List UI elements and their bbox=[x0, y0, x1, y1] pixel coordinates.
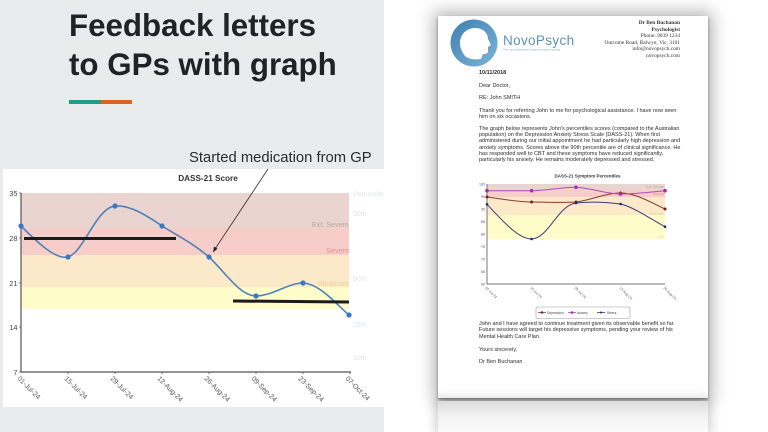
logo bbox=[450, 20, 574, 66]
band labels: Moderate bbox=[319, 279, 349, 288]
x axis labels: 29-Jul-24 bbox=[573, 286, 587, 299]
title: to GPs with graph bbox=[69, 46, 337, 82]
title accent bar bbox=[69, 100, 132, 104]
percentile axis labels bbox=[353, 192, 388, 362]
letter body top: RE: John SMITH bbox=[479, 95, 520, 101]
percentile axis labels: 90th bbox=[353, 211, 367, 218]
trend line: after medication bbox=[233, 301, 349, 302]
callout: started medication: Started medication from GP bbox=[189, 150, 372, 166]
y axis labels: 85 bbox=[481, 220, 485, 224]
letter body bottom bbox=[479, 321, 675, 365]
panel: letter shadow bbox=[438, 16, 708, 398]
x axis labels: 07-Oct-24 bbox=[344, 375, 371, 402]
letter chart: DASS-21 symptom percentiles: DASS-21 Symptom Percentiles bbox=[554, 174, 621, 178]
letter body top bbox=[479, 70, 680, 163]
y axis labels: 7 bbox=[13, 368, 18, 377]
letterhead contact: Phone: 9039 1234 bbox=[641, 33, 680, 39]
letter body bottom: Yours sincerely, bbox=[479, 346, 517, 352]
severity bands bbox=[21, 193, 349, 309]
x axis labels: 23-Sep-24 bbox=[297, 375, 325, 404]
y axis labels: 100 bbox=[479, 182, 485, 186]
anxiety line bbox=[485, 186, 667, 196]
chart legend: Anxiety bbox=[577, 311, 588, 315]
y axis labels: 75 bbox=[481, 245, 485, 249]
chart legend: Depression bbox=[547, 311, 564, 315]
panel: next page bbox=[438, 401, 708, 432]
letter body top: him on six occasions. bbox=[479, 114, 531, 120]
panel: left background bbox=[0, 0, 384, 432]
bands bbox=[487, 184, 665, 239]
letter body top: particularly his anxiety. He remains moderately depressed and stressed. bbox=[479, 157, 654, 163]
letterhead contact: Outcome Road, Balwyn, Vic, 3101 bbox=[605, 40, 680, 46]
x axis labels: 26-Aug-24 bbox=[662, 286, 677, 301]
letter body top: has responded well to CBT and these symptoms have reduced significantly, bbox=[479, 151, 663, 157]
x axis labels: 12-Aug-24 bbox=[156, 375, 184, 404]
x axis labels: 01-Jul-24 bbox=[484, 286, 498, 299]
letter body bottom: Dr Ben Buchanan bbox=[479, 359, 522, 365]
axes bbox=[19, 193, 351, 374]
logo: The new standard in psychometric testing bbox=[503, 48, 560, 52]
letterhead contact: info@novopsych.com bbox=[632, 46, 680, 52]
letter body top: The graph below represents John's percentiles scores (compared to the Australian bbox=[479, 126, 679, 132]
band labels: Mild bbox=[658, 235, 664, 239]
score line bbox=[18, 203, 352, 318]
panel: DASS-21 score chart bbox=[3, 168, 384, 407]
y axis labels: 14 bbox=[9, 323, 18, 332]
y axis labels bbox=[479, 182, 485, 286]
percentile axis labels: 80th bbox=[353, 276, 367, 283]
x axis labels bbox=[484, 286, 677, 301]
axes bbox=[487, 184, 665, 284]
letter body top: Dear Doctor, bbox=[479, 82, 510, 88]
band labels: Ext. Severe bbox=[312, 220, 349, 229]
letterhead contact: Psychologist bbox=[652, 26, 680, 32]
y axis labels: 65 bbox=[481, 270, 485, 274]
arrow: medication start bbox=[213, 169, 268, 252]
letter body top: administered during our initial appointment he had particularly high depression and bbox=[479, 138, 680, 144]
x axis labels: 12-Aug-24 bbox=[618, 286, 633, 301]
band labels: Ext. Severe bbox=[646, 185, 664, 189]
x axis labels: 01-Jul-24 bbox=[16, 375, 41, 401]
trend line: early baseline bbox=[24, 237, 176, 240]
x axis labels bbox=[16, 375, 371, 404]
band labels: Severe bbox=[326, 246, 349, 255]
title bbox=[69, 8, 337, 82]
logo: NovoPsych bbox=[503, 33, 574, 48]
x axis labels: 26-Aug-24 bbox=[203, 375, 231, 404]
chart legend bbox=[536, 306, 630, 319]
letter body top: population) on the Depression Anxiety Stress Scale (DASS-21). When first bbox=[479, 132, 660, 138]
letterhead contact: Dr Ben Buchanan bbox=[639, 20, 680, 26]
letter body bottom: Future sessions will target his depressive symptoms, pending your review of his bbox=[479, 327, 673, 333]
letter body top: 10/11/2018 bbox=[479, 70, 506, 76]
letterhead contact bbox=[604, 20, 680, 58]
y axis labels bbox=[9, 189, 18, 377]
letter body top: anxiety symptoms. Scores above the 90th percentile are of clinical significance. He bbox=[479, 145, 680, 151]
chart legend: Stress bbox=[607, 311, 617, 315]
band labels: Moderate bbox=[649, 212, 664, 216]
x axis labels: 15-Jul-24 bbox=[529, 286, 543, 299]
y axis labels: 60 bbox=[481, 282, 485, 286]
x axis labels: 15-Jul-24 bbox=[63, 375, 88, 401]
chart title: DASS-21 Score bbox=[178, 174, 238, 183]
depression line bbox=[486, 192, 666, 210]
letter body bottom: Mental Health Care Plan. bbox=[479, 334, 540, 340]
band labels bbox=[312, 220, 349, 288]
letter body top: Thank you for referring John to me for psychological assistance. I have now seen bbox=[479, 108, 676, 114]
panel: letter content bbox=[450, 20, 680, 365]
y axis labels: 80 bbox=[481, 232, 485, 236]
letter chart: DASS-21 symptom percentiles bbox=[479, 174, 677, 301]
y axis labels: 70 bbox=[481, 258, 485, 262]
y axis labels: 35 bbox=[9, 189, 18, 198]
letter body bottom: John and I have agreed to continue treatment given its observable benefit so far. bbox=[479, 321, 675, 327]
stress line bbox=[486, 202, 666, 240]
band labels: Severe bbox=[653, 192, 664, 196]
y axis labels: 21 bbox=[9, 279, 18, 288]
title: Feedback letters bbox=[69, 8, 316, 43]
x axis labels: 29-Jul-24 bbox=[109, 375, 134, 401]
letterhead contact: novopsych.com bbox=[646, 52, 680, 58]
y axis labels: 90 bbox=[481, 208, 485, 212]
x axis labels: 09-Sep-24 bbox=[250, 375, 278, 404]
percentile axis labels: 75th bbox=[353, 322, 367, 329]
percentile axis labels: 50th bbox=[353, 355, 367, 362]
band labels bbox=[646, 185, 664, 239]
y axis labels: 95 bbox=[481, 195, 485, 199]
y axis labels: 28 bbox=[9, 234, 18, 243]
